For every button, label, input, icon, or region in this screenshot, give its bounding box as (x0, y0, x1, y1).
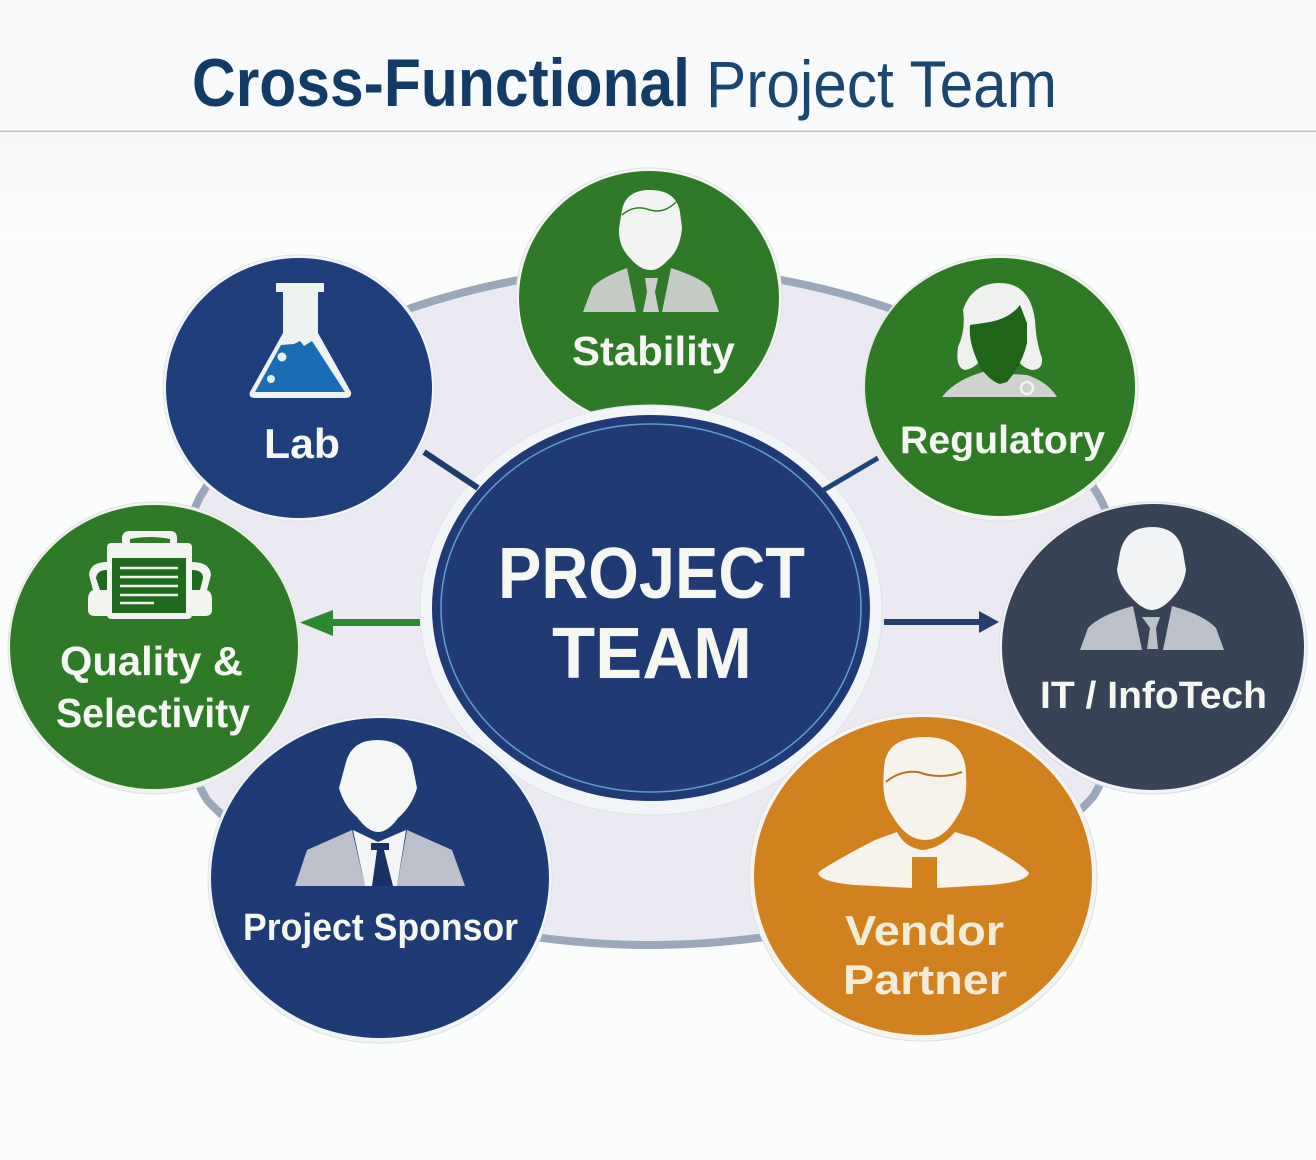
label: Project Team (498, 534, 805, 694)
arrow: to quality and selectivity (300, 610, 420, 636)
label: Vendor Partner (843, 907, 1007, 1003)
title: Project Team (706, 47, 1057, 121)
node: lab (163, 255, 435, 521)
label: Project Sponsor: Project Sponsor (243, 907, 518, 949)
label: IT / InfoTech: IT / InfoTech (1040, 675, 1267, 717)
node: regulatory (864, 255, 1138, 521)
icon: person (1080, 527, 1224, 650)
node: quality and selectivity (8, 502, 300, 794)
node: IT / InfoTech (999, 502, 1307, 794)
title: Cross-Functional (192, 45, 690, 121)
label: Vendor Partner: Vendor (845, 907, 1004, 954)
connector: lab to center (424, 452, 478, 488)
icon: man (583, 190, 719, 312)
icon: man with hair (818, 737, 1029, 888)
connector: regulatory to center (822, 458, 878, 491)
label: Lab: Lab (264, 420, 340, 467)
label: Quality & Selectivity: Quality & (60, 638, 243, 684)
arrow: to IT / InfoTech (884, 611, 999, 633)
label: Stability: Stability (572, 328, 735, 374)
label: Quality & Selectivity: Selectivity (56, 690, 250, 736)
node: project sponsor (208, 715, 552, 1043)
connecting ring (167, 268, 1133, 945)
node: vendor partner (749, 713, 1097, 1041)
label: Project Team: PROJECT (498, 534, 805, 614)
icon: clipboard case (88, 531, 212, 619)
label: Regulatory: Regulatory (900, 419, 1105, 462)
label: Vendor Partner: Partner (843, 956, 1007, 1003)
icon: man with tie (295, 740, 465, 886)
title (192, 45, 1057, 121)
label: Project Team: TEAM (552, 614, 752, 694)
label: Quality & Selectivity (56, 638, 250, 736)
node: stability (516, 168, 782, 428)
icon: woman (942, 283, 1057, 397)
icon: flask (250, 283, 351, 398)
node: project team center (420, 405, 882, 815)
